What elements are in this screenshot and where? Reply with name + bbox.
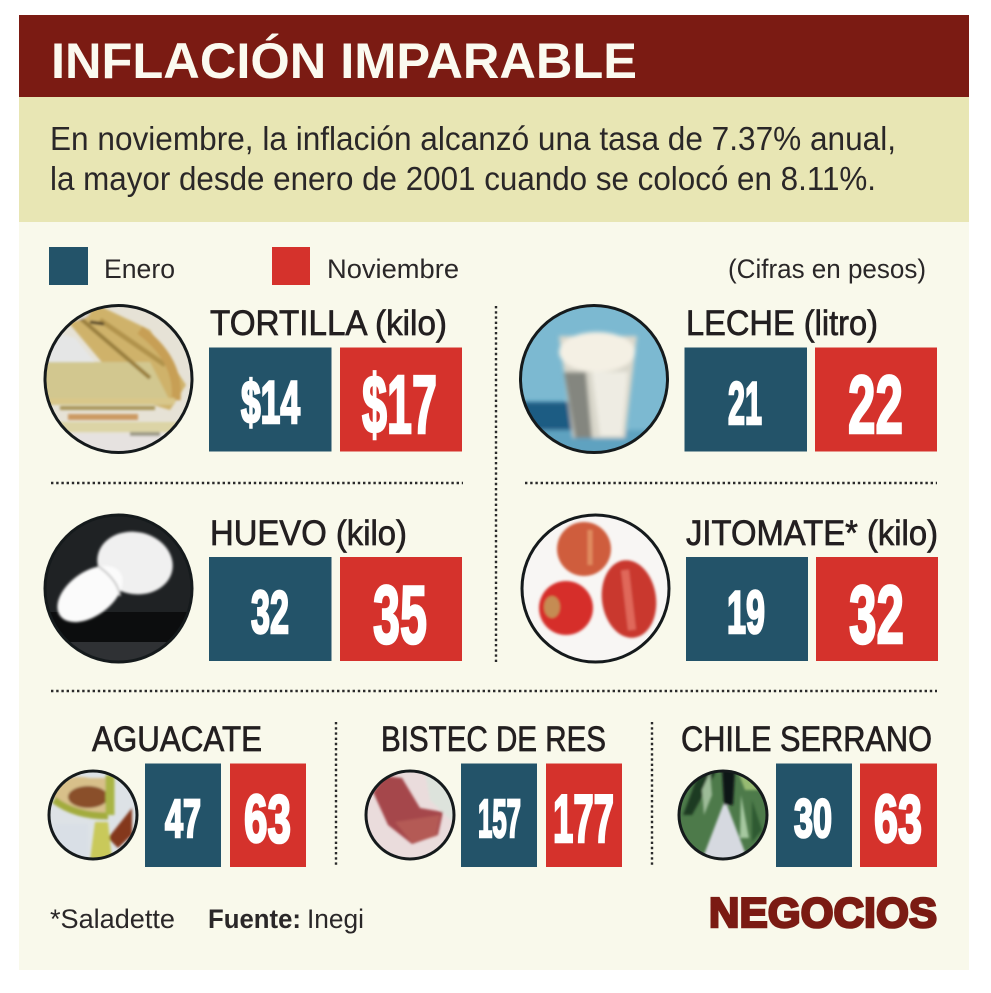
noviembre value: $17 <box>362 358 437 451</box>
panel: bistec de res <box>365 720 622 867</box>
icon: tortillas <box>30 302 194 454</box>
enero value <box>686 557 808 661</box>
enero value <box>209 348 332 452</box>
enero value: 157 <box>478 789 521 849</box>
legend: Noviembre <box>327 254 459 284</box>
footnote: *Saladette <box>50 904 175 934</box>
panel: jitomate <box>521 514 938 664</box>
panel: leche <box>519 304 937 455</box>
panel: tortilla <box>30 302 462 454</box>
icon: chiles <box>678 770 768 860</box>
noviembre value <box>340 348 462 452</box>
noviembre value <box>230 764 306 867</box>
source <box>208 904 364 934</box>
source: Fuente: <box>208 904 301 934</box>
heading: JITOMATE* (kilo) <box>686 514 938 553</box>
noviembre value: 32 <box>849 568 904 661</box>
intro text <box>50 120 896 197</box>
units note: (Cifras en pesos) <box>728 254 926 284</box>
heading: HUEVO (kilo) <box>210 514 407 553</box>
noviembre value <box>340 557 462 661</box>
heading: AGUACATE <box>92 720 262 759</box>
icon: milk glass <box>519 304 669 455</box>
enero value <box>461 764 537 867</box>
icon: eggs <box>44 514 194 664</box>
intro text: la mayor desde enero de 2001 cuando se colocó en 8.11%. <box>50 160 876 197</box>
heading: BISTEC DE RES <box>381 720 606 759</box>
enero value <box>776 764 852 867</box>
intro panel <box>19 97 969 222</box>
intro text: En noviembre, la inflación alcanzó una tasa de 7.37% anual, <box>50 120 896 157</box>
enero value <box>209 557 332 661</box>
icon: tomatoes <box>521 514 671 664</box>
legend <box>49 247 459 285</box>
enero value: 30 <box>794 789 832 849</box>
noviembre value: 35 <box>373 568 427 661</box>
noviembre value <box>816 557 938 661</box>
source: Inegi <box>307 904 364 934</box>
noviembre value <box>860 764 937 867</box>
section logo: NEGOCIOS <box>709 889 937 936</box>
main panel background <box>19 222 969 970</box>
icon: avocado <box>48 770 138 860</box>
enero value <box>684 348 807 452</box>
heading: TORTILLA (kilo) <box>210 304 447 343</box>
heading: LECHE (litro) <box>686 304 878 343</box>
noviembre value: 177 <box>553 781 614 857</box>
noviembre value: 22 <box>848 358 903 451</box>
noviembre value <box>546 764 622 867</box>
enero value: 47 <box>165 789 201 849</box>
enero value: 32 <box>251 579 289 646</box>
enero value: 19 <box>727 579 765 646</box>
panel: huevo <box>44 514 462 664</box>
heading: CHILE SERRANO <box>681 720 932 759</box>
enero value: 21 <box>728 370 762 437</box>
enero value <box>145 764 221 867</box>
legend: Enero <box>104 254 175 284</box>
panel: aguacate <box>48 720 306 867</box>
title banner <box>19 15 969 97</box>
noviembre value: 63 <box>874 781 922 857</box>
panel: chile serrano <box>678 720 937 867</box>
title: INFLACIÓN IMPARABLE <box>51 33 637 89</box>
enero value: $14 <box>241 369 300 436</box>
icon: steak <box>365 770 456 860</box>
noviembre value: 63 <box>244 781 291 857</box>
noviembre value <box>815 348 937 452</box>
